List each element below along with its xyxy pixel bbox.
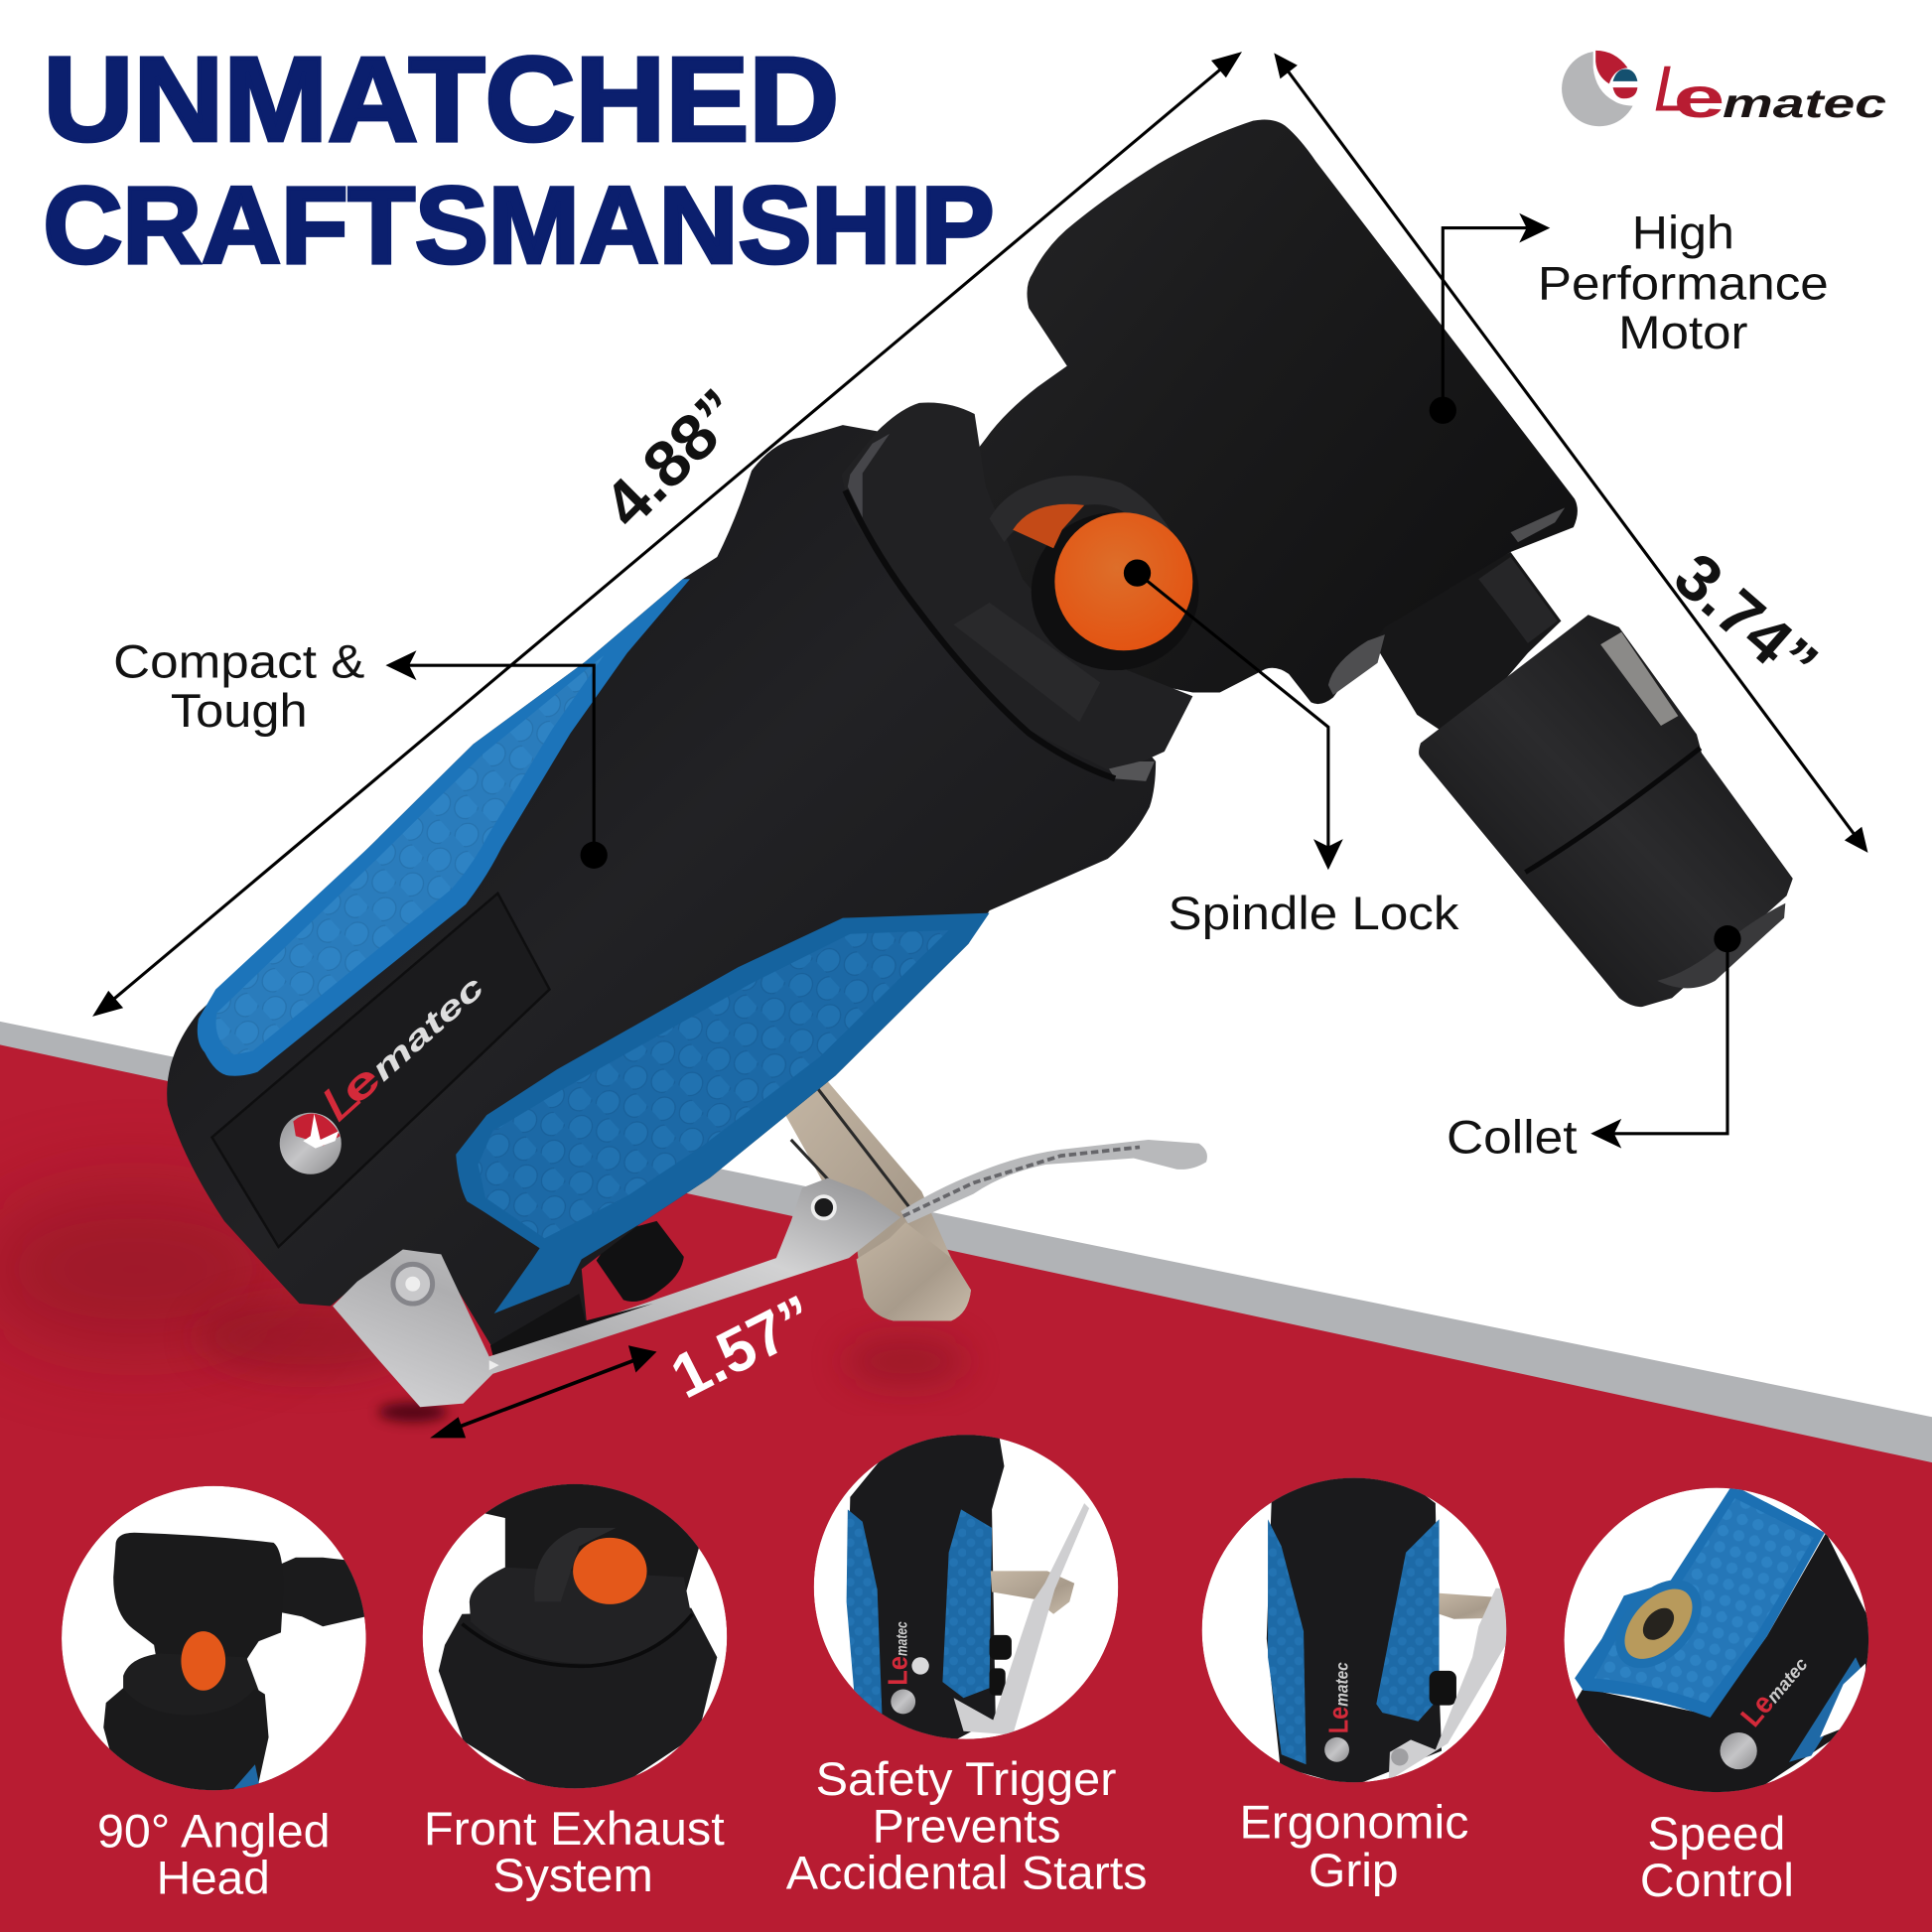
title: UNMATCHED [43,32,839,166]
caption: speed control [1640,1807,1794,1906]
dimension label: 1.57 inches: 1.57” [661,1283,826,1412]
dimension arrow: 4.88 inches [92,52,1242,1017]
caption: safety trigger: Prevents [873,1799,1061,1852]
chrome trigger [333,1140,1207,1407]
feature: ergonomic grip [1202,1476,1509,1896]
feature: front exhaust system [423,1472,727,1901]
photo circle: speed control: matec [1762,1653,1812,1707]
upper blue grip [198,579,690,1076]
callout: high performance motor: High [1632,207,1734,259]
logo: Lematec: L [1654,54,1691,125]
title [43,32,995,286]
main tool: angle die grinder [167,120,1793,1407]
photo circle: speed control [1565,1484,1872,1811]
feature: safety trigger [786,1430,1147,1899]
logo plate outline [211,894,550,1247]
collet section [1365,552,1793,1007]
speed control button [597,1221,684,1302]
red background panel [0,1044,1932,1932]
feature: speed control [1565,1484,1872,1906]
dimension label: 3.74 inches: 3.74” [1661,538,1832,700]
caption: 90 degree angled head: 90° Angled [97,1804,331,1857]
caption: ergonomic grip: Ergonomic [1240,1796,1468,1849]
tool shadows on red panel [0,1189,967,1422]
photo circle: safety trigger: matec [893,1621,910,1656]
caption: 90 degree angled head: Head [157,1852,270,1904]
callout: high performance motor: Motor [1618,306,1747,358]
callout: collet: Collet [1447,1111,1578,1164]
dimension label: 4.88 inches: 4.88” [589,374,756,541]
photo circle: safety trigger: Le [882,1656,912,1686]
motor head [968,120,1578,704]
logo: Lematec: matec [1723,80,1886,126]
callout: compact and tough [113,635,608,869]
photo circle: ergonomic grip [1202,1476,1509,1787]
photo circle: front exhaust [423,1472,727,1793]
orange back crescent [1013,504,1084,548]
photo circle: angled head [62,1486,366,1799]
caption: safety trigger: Safety Trigger [816,1752,1116,1805]
dimension arrow: 3.74 inches [1274,53,1867,853]
collar [842,402,1192,781]
caption: safety trigger [786,1752,1147,1899]
photo circle: ergonomic grip: matec [1332,1662,1352,1707]
callout: compact and tough: Compact & [113,635,364,688]
callout: spindle lock [1124,559,1459,939]
caption: safety trigger: Accidental Starts [786,1847,1147,1899]
trigger plate edge [791,1084,914,1213]
orange spindle lock button [1054,512,1192,650]
grey diagonal band [0,1022,1932,1466]
callout: high performance motor [1430,207,1829,424]
head end face [1328,507,1565,695]
caption: front exhaust system: System [492,1849,653,1901]
callout: compact and tough: Tough [171,684,308,737]
photo circle: ergonomic grip: Le [1323,1707,1354,1733]
photo circle: safety trigger [814,1430,1118,1743]
feature: 90 degree angled head [62,1486,366,1904]
callout: collet [1447,925,1741,1164]
callout: spindle lock: Spindle Lock [1169,887,1459,939]
caption: speed control: Control [1640,1854,1794,1906]
caption: front exhaust system: Front Exhaust [424,1802,725,1855]
callout: high performance motor: Performance [1538,257,1829,310]
body logo: L [309,1067,371,1131]
body shell [167,425,1156,1350]
title: CRAFTSMANSHIP [43,165,995,286]
lower blue grip [456,913,990,1313]
body logo: matec [364,969,490,1088]
logo: Lematec [1562,45,1886,130]
paddle over lever [857,1222,971,1320]
body logo [280,958,492,1174]
body logo: e [331,1054,389,1114]
button hood [990,476,1180,548]
caption: speed control: Speed [1647,1807,1785,1860]
button recess [1032,512,1199,670]
trigger plate [780,1082,971,1320]
photo circle: speed control: Le [1734,1688,1780,1733]
dimension arrow: 1.57 inches [430,1345,656,1438]
caption: ergonomic grip [1240,1796,1468,1896]
caption: 90 degree angled head [97,1804,331,1904]
caption: front exhaust system [424,1802,725,1901]
caption: ergonomic grip: Grip [1309,1844,1399,1896]
logo: Lematec: e [1673,67,1725,130]
